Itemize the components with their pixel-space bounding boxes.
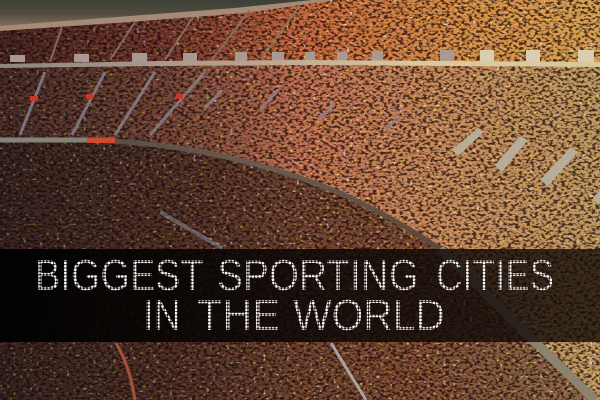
lower tier light aisle: [160, 212, 222, 248]
upper tier vents: [10, 50, 594, 62]
stadium tier edge: [0, 140, 440, 249]
middle tier aisles: [20, 72, 400, 135]
title line 1: BIGGEST: [35, 251, 203, 300]
middle tier concrete blocks on the right: [452, 128, 600, 204]
background: trees beyond the stadium: [0, 0, 320, 29]
upper tier seating: [0, 0, 600, 64]
upper tier aisles: [50, 5, 300, 62]
title line 2: THE: [197, 291, 280, 340]
title line 2: IN: [143, 291, 181, 340]
title line 1: SPORTING: [217, 251, 419, 300]
title line 1: CITIES: [436, 251, 554, 300]
bottom aisles: [116, 343, 366, 400]
red sign on tier edge: [87, 138, 115, 143]
concrete rim above upper tier: [0, 0, 335, 31]
lower tier seating: [0, 140, 595, 400]
lower tier edge continuing to bottom right: [440, 249, 595, 400]
grey left part of tier edge: [0, 138, 88, 142]
red markers: [30, 94, 183, 101]
walkway: [0, 60, 600, 68]
title band: [0, 249, 600, 342]
title line 2: WORLD: [293, 291, 445, 340]
title: [35, 251, 554, 340]
